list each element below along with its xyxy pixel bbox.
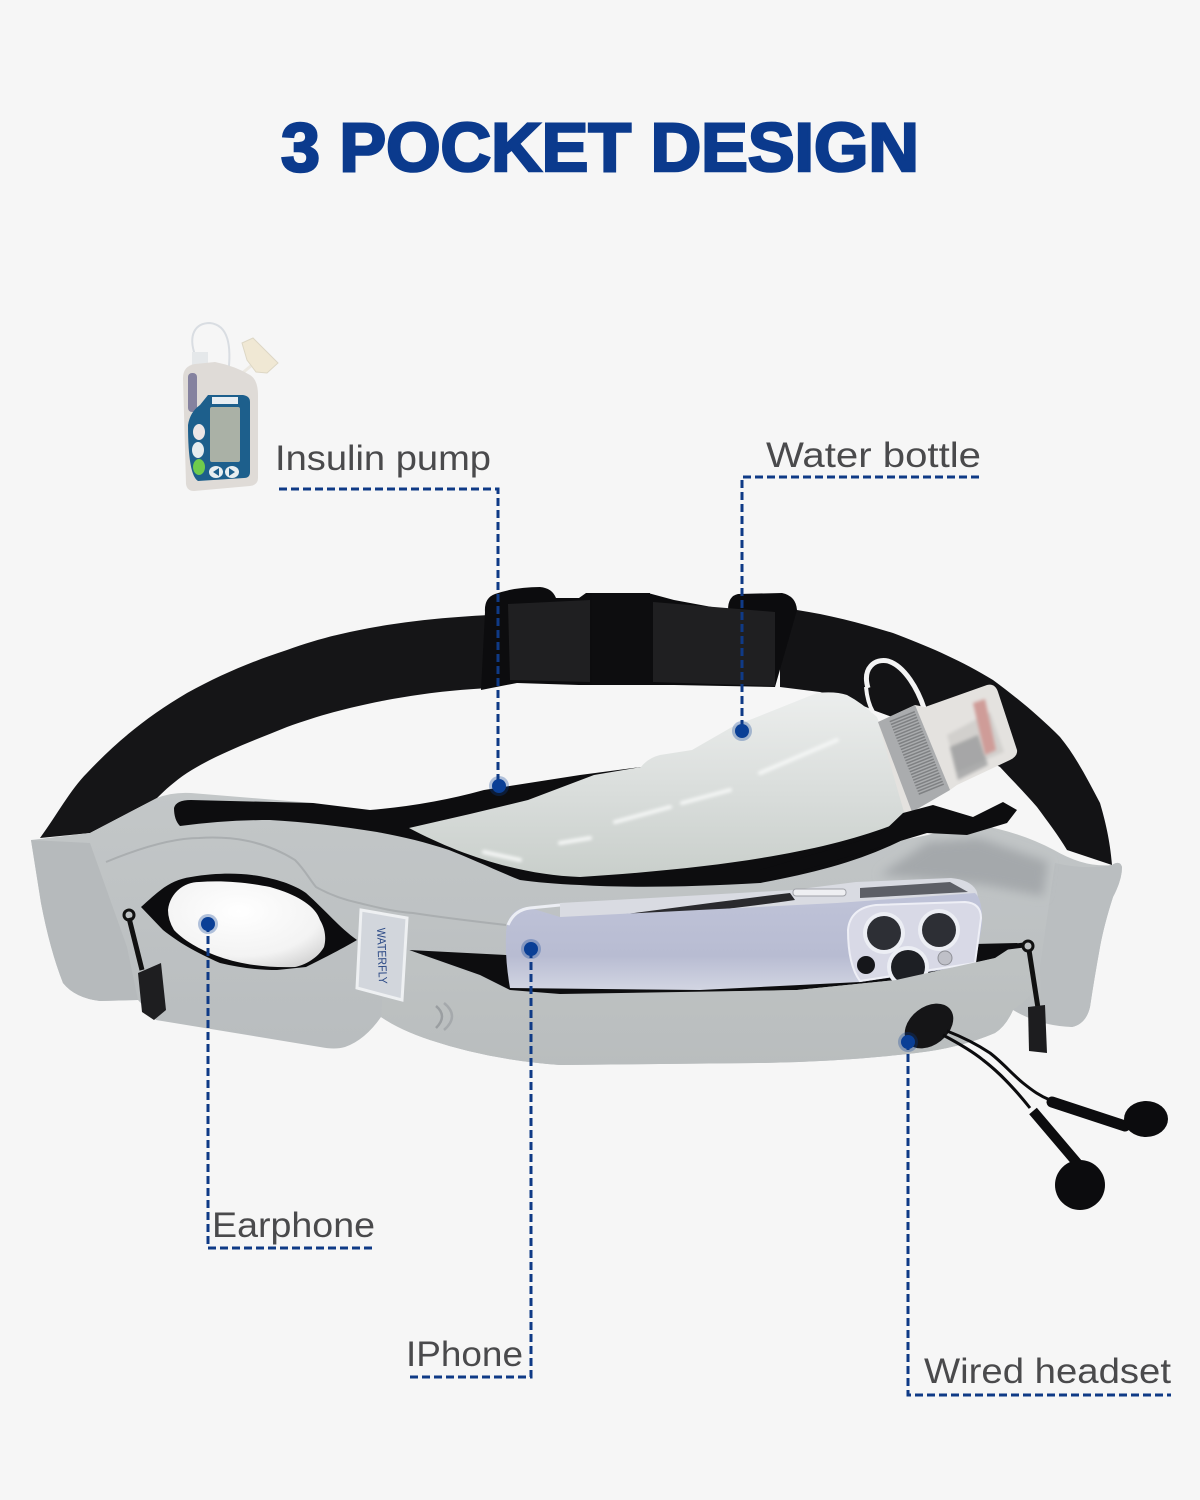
earphone case in left pocket — [141, 874, 357, 970]
label: water bottle: Water bottle — [766, 436, 981, 475]
fabric label: WATERFLY — [374, 928, 390, 984]
buckle — [481, 587, 797, 690]
zipper pull: left pocket — [124, 910, 166, 1020]
water bottle — [409, 660, 1017, 877]
reflective logo — [436, 1003, 452, 1030]
top pocket zipper — [174, 767, 930, 887]
belt strap — [40, 610, 1112, 865]
dashed leader lines — [208, 477, 1171, 1395]
zipper pull: right pocket — [1000, 941, 1047, 1053]
front pocket panel — [381, 943, 1040, 1065]
phone in right pocket — [409, 878, 1018, 994]
icon: insulin pump — [183, 323, 278, 491]
zipper pull: top pocket — [760, 802, 1017, 883]
marker dots — [198, 721, 918, 1052]
label: wired headset: Wired headset — [924, 1352, 1171, 1391]
label: earphone: Earphone — [212, 1206, 375, 1245]
label: iphone: IPhone — [406, 1335, 523, 1374]
label: insulin pump: Insulin pump — [275, 439, 491, 478]
fabric label — [357, 910, 407, 1000]
headphone port and wired earphones — [896, 994, 1168, 1210]
title: 3 POCKET DESIGN — [281, 109, 919, 186]
waist pack body — [31, 790, 1122, 1065]
